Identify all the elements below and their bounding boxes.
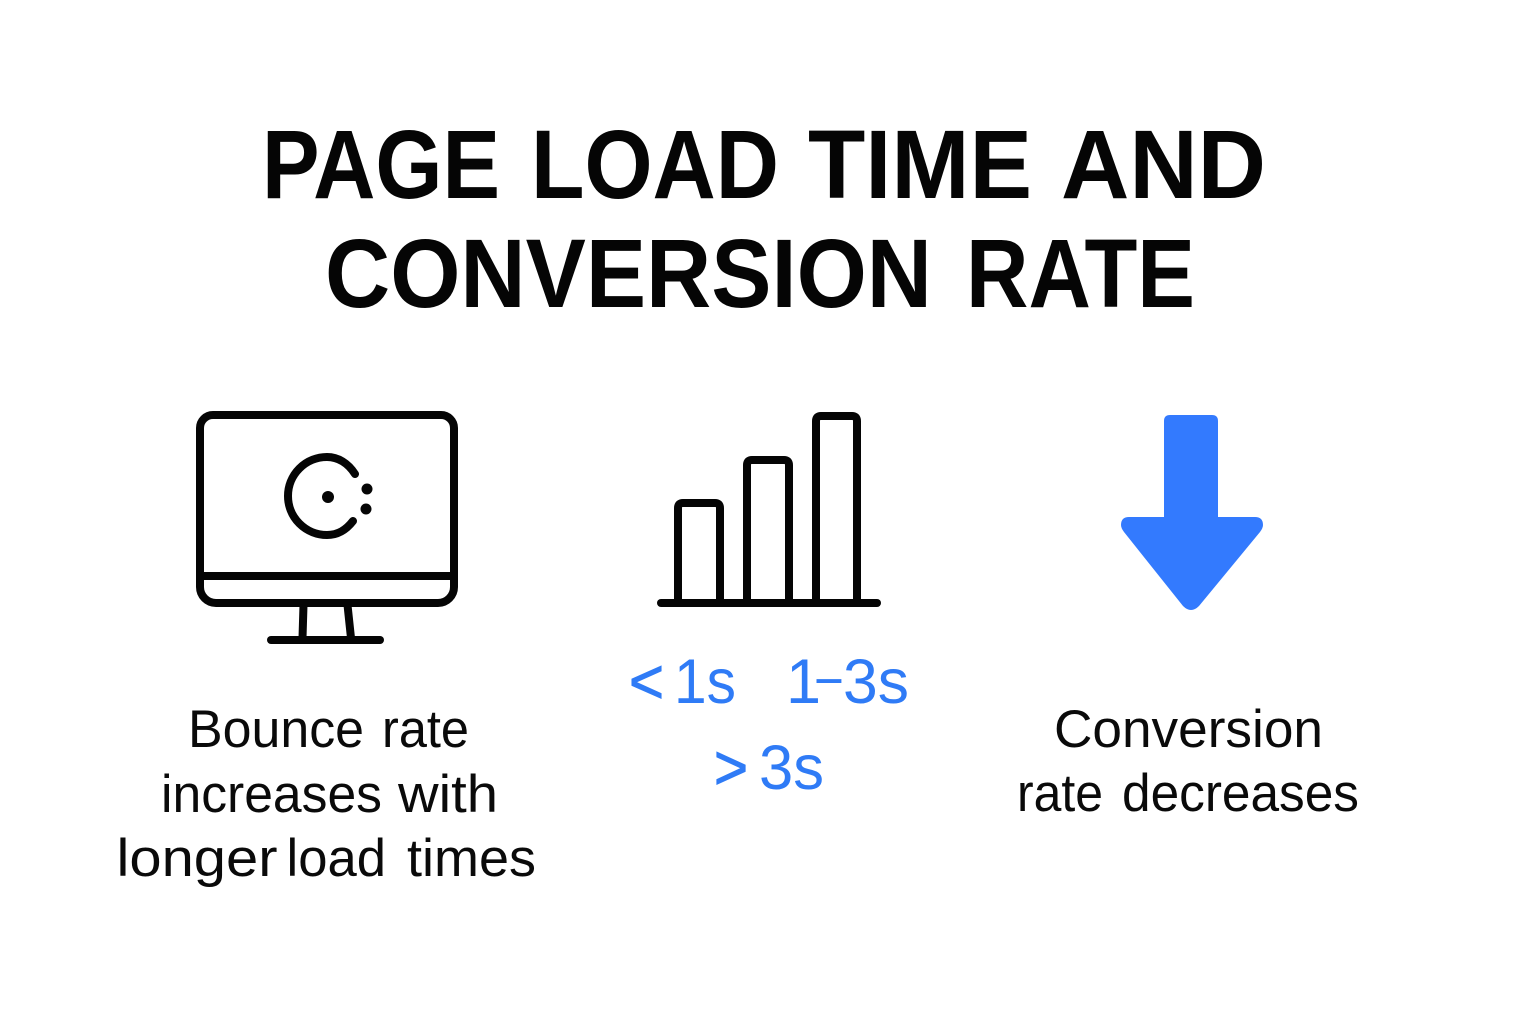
text: bounce rate caption: load (286, 829, 386, 888)
load time labels (629, 647, 909, 803)
text: conversion rate caption: Conversion (1054, 700, 1323, 759)
text: bounce rate caption (116, 700, 536, 888)
load time labels: < (629, 647, 664, 717)
text: conversion rate caption: rate (1017, 764, 1103, 823)
bar chart icon (661, 416, 877, 603)
arrow: conversion rate falling (1121, 415, 1263, 610)
text: bounce rate caption: times (407, 829, 536, 888)
title (262, 110, 1266, 328)
load time labels: 3s (843, 647, 909, 717)
text: bounce rate caption: longer (116, 829, 278, 888)
load time labels: 1s (674, 647, 736, 717)
title: AND (1061, 110, 1266, 219)
text: bounce rate caption: increases (161, 765, 382, 824)
title: LOAD (531, 110, 779, 219)
text: conversion rate caption: decreases (1122, 764, 1359, 823)
load time labels: 3s (759, 733, 824, 803)
title: TIME (808, 110, 1032, 219)
text: conversion rate caption (1017, 700, 1359, 823)
title: RATE (966, 219, 1195, 328)
load time labels: – (817, 654, 841, 702)
title: CONVERSION (325, 219, 932, 328)
text: bounce rate caption: with (397, 765, 498, 824)
title: PAGE (262, 110, 500, 219)
load time labels: > (714, 733, 748, 803)
load time labels: 1 (786, 647, 821, 717)
icon: desktop monitor with loading spinner (200, 415, 454, 640)
text: bounce rate caption: Bounce (188, 700, 364, 759)
text: bounce rate caption: rate (382, 700, 469, 759)
